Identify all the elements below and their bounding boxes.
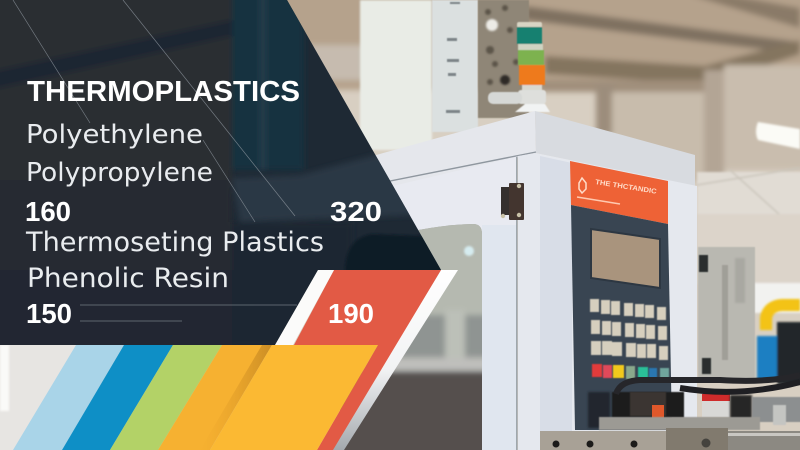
text: polyethylene: Polyethylene — [26, 120, 203, 150]
red accent band with white strips — [275, 270, 458, 450]
screen — [591, 229, 660, 288]
text: thermoseting plastics: Thermoseting Plastics — [25, 227, 324, 258]
decorative diagonal lines — [13, 0, 297, 321]
white column with scale and perforated plate — [360, 0, 529, 150]
stripe: orange — [158, 345, 272, 450]
text: polypropylene: Polypropylene — [26, 158, 213, 188]
yellow pipe and blue box — [757, 305, 800, 384]
stripe: green — [110, 345, 222, 450]
orange sticker — [570, 161, 668, 224]
signal tower light — [488, 22, 550, 112]
dark title panel — [0, 0, 445, 350]
number: 160: 160 — [25, 196, 71, 227]
left pale wall area — [0, 345, 100, 450]
side gray box — [698, 247, 755, 380]
door frame right — [482, 225, 516, 450]
stripe shadow — [200, 345, 272, 450]
cabinet top face — [340, 111, 536, 200]
heading: thermoplastics: THERMOPLASTICS — [27, 76, 300, 108]
cables and metal block — [540, 375, 800, 450]
number: 190: 190 — [328, 298, 374, 329]
door window — [340, 224, 482, 450]
keypad — [590, 299, 668, 360]
text: phenolic resin: Phenolic Resin — [27, 263, 229, 294]
machine cabinet — [330, 111, 697, 450]
coloured keys — [592, 364, 669, 380]
cabinet right face — [518, 153, 697, 450]
stripe: blue — [62, 345, 173, 450]
cabinet front door — [340, 157, 516, 450]
stripe: light blue — [13, 345, 124, 450]
number: 150: 150 — [26, 298, 72, 329]
ceiling light — [756, 122, 800, 149]
number: 320: 320 — [330, 196, 382, 227]
control panel — [571, 205, 672, 430]
hinge — [501, 183, 524, 220]
stripe: yellow — [210, 345, 378, 450]
coloured diagonal stripes — [13, 345, 378, 450]
orange sticker: THE THCTANDIC — [595, 179, 657, 196]
